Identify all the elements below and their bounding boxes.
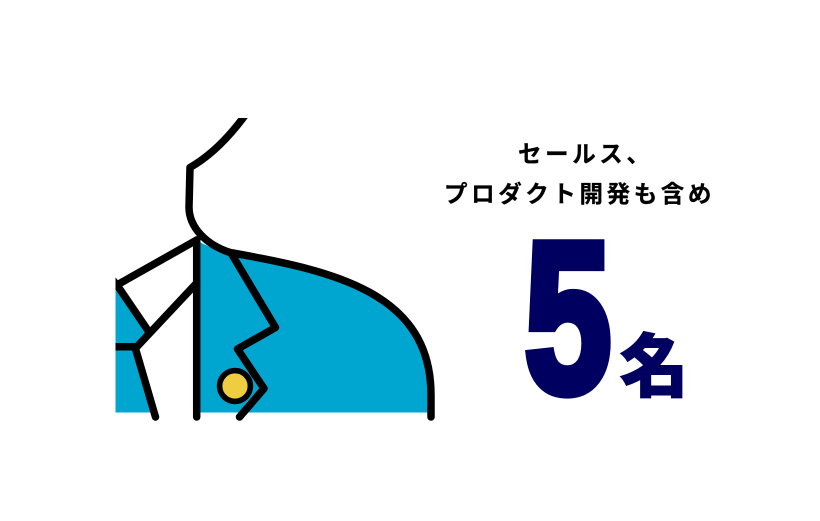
- big number 5: 5: [524, 197, 611, 437]
- icon: yellow lapel pin: [220, 371, 250, 401]
- icon: person in blue jacket: [112, 114, 431, 417]
- unit label: 名: [620, 329, 688, 406]
- heading text: セールス、: [518, 141, 654, 167]
- heading text: プロダクト開発も含め: [444, 180, 715, 207]
- neck and shoulder outline: [189, 114, 431, 417]
- heading text: [444, 141, 715, 207]
- left collar and lapel: [112, 240, 197, 417]
- center front line: [193, 240, 200, 417]
- jacket right body fill: [197, 240, 431, 412]
- jacket left body fill: [116, 290, 150, 412]
- right lapel: [231, 253, 276, 417]
